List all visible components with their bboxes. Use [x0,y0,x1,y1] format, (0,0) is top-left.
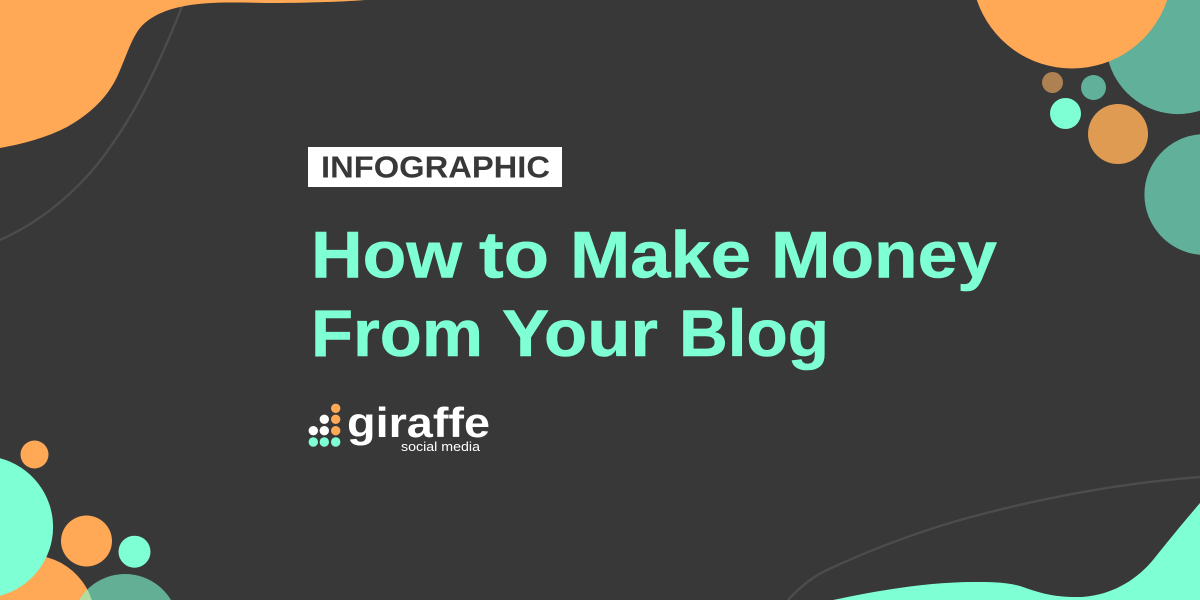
title: to [479,218,549,292]
circles: top right cluster [977,0,1200,255]
title: Blog [679,296,829,370]
curved line: bottom right [788,477,1200,600]
title: How [311,218,463,292]
title: Money [771,218,997,292]
logo: giraffe social media [309,399,490,454]
blob: top left orange [0,0,365,148]
blob: bottom right mint [833,503,1200,600]
title: Make [570,218,751,292]
curved line: top left [0,4,183,240]
title: Your [502,296,658,370]
title [311,218,997,370]
title: From [311,296,483,370]
icon: logo dots [309,404,340,447]
logo wordmark: giraffe [347,399,490,446]
logo tagline: social media [401,440,480,454]
label: infographic tag: INFOGRAPHIC [321,151,550,185]
circles: bottom left cluster [0,440,171,600]
